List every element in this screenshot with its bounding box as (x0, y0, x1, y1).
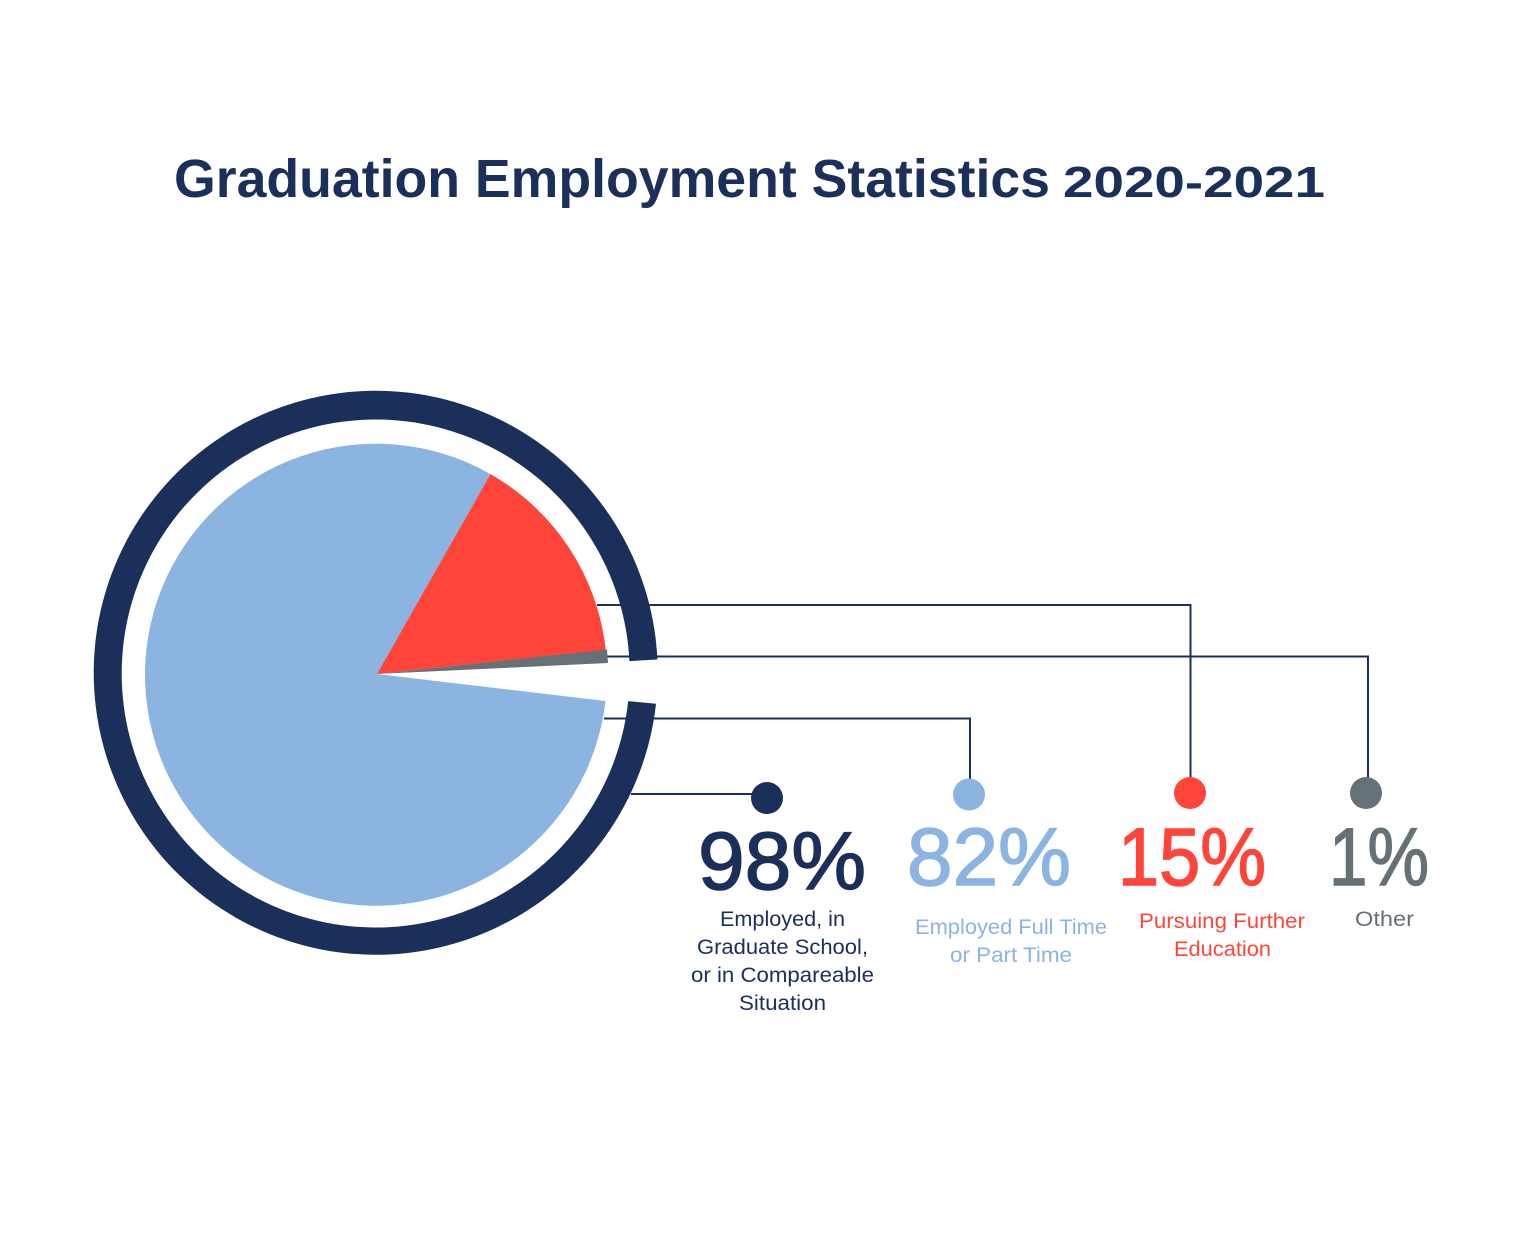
pie slice: other (377, 650, 608, 674)
dot: 82% (953, 778, 985, 810)
stat: 82% full or part time: Employed Full Time (915, 915, 1107, 939)
stat: 15% further education (1118, 812, 1305, 961)
stat: 15% further education: Education (1174, 937, 1271, 961)
stat: 82% full or part time: or Part Time (950, 943, 1072, 967)
stat: 1% other: 1% (1329, 812, 1429, 903)
dot: 15% (1174, 777, 1206, 809)
stat: 98% employed (691, 816, 874, 1015)
stat: 82% full or part time (907, 812, 1107, 967)
pie slice: employed full or part time (145, 444, 605, 906)
dot: 1% (1350, 777, 1382, 809)
outer ring (94, 391, 657, 955)
title: 2020-2021 (1063, 158, 1325, 207)
stat: 1% other: Other (1355, 907, 1414, 931)
marker dots (751, 777, 1382, 814)
pie slice: pursuing further education (377, 474, 606, 674)
title: Graduation Employment Statistics (174, 149, 1050, 209)
stat: 98% employed: 98% (698, 816, 866, 907)
stat: 98% employed: Situation (739, 991, 826, 1015)
pie chart (145, 444, 608, 906)
stat: 15% further education: Pursuing Further (1139, 909, 1305, 933)
stat: 98% employed: or in Compareable (691, 963, 874, 987)
stat: 98% employed: Graduate School, (697, 935, 868, 959)
stat: 82% full or part time: 82% (907, 812, 1071, 903)
connector lines (597, 605, 1368, 794)
stat: 98% employed: Employed, in (720, 907, 845, 931)
stat: 1% other (1329, 812, 1429, 931)
dot: 98% (751, 782, 783, 814)
stat: 15% further education: 15% (1118, 812, 1266, 903)
